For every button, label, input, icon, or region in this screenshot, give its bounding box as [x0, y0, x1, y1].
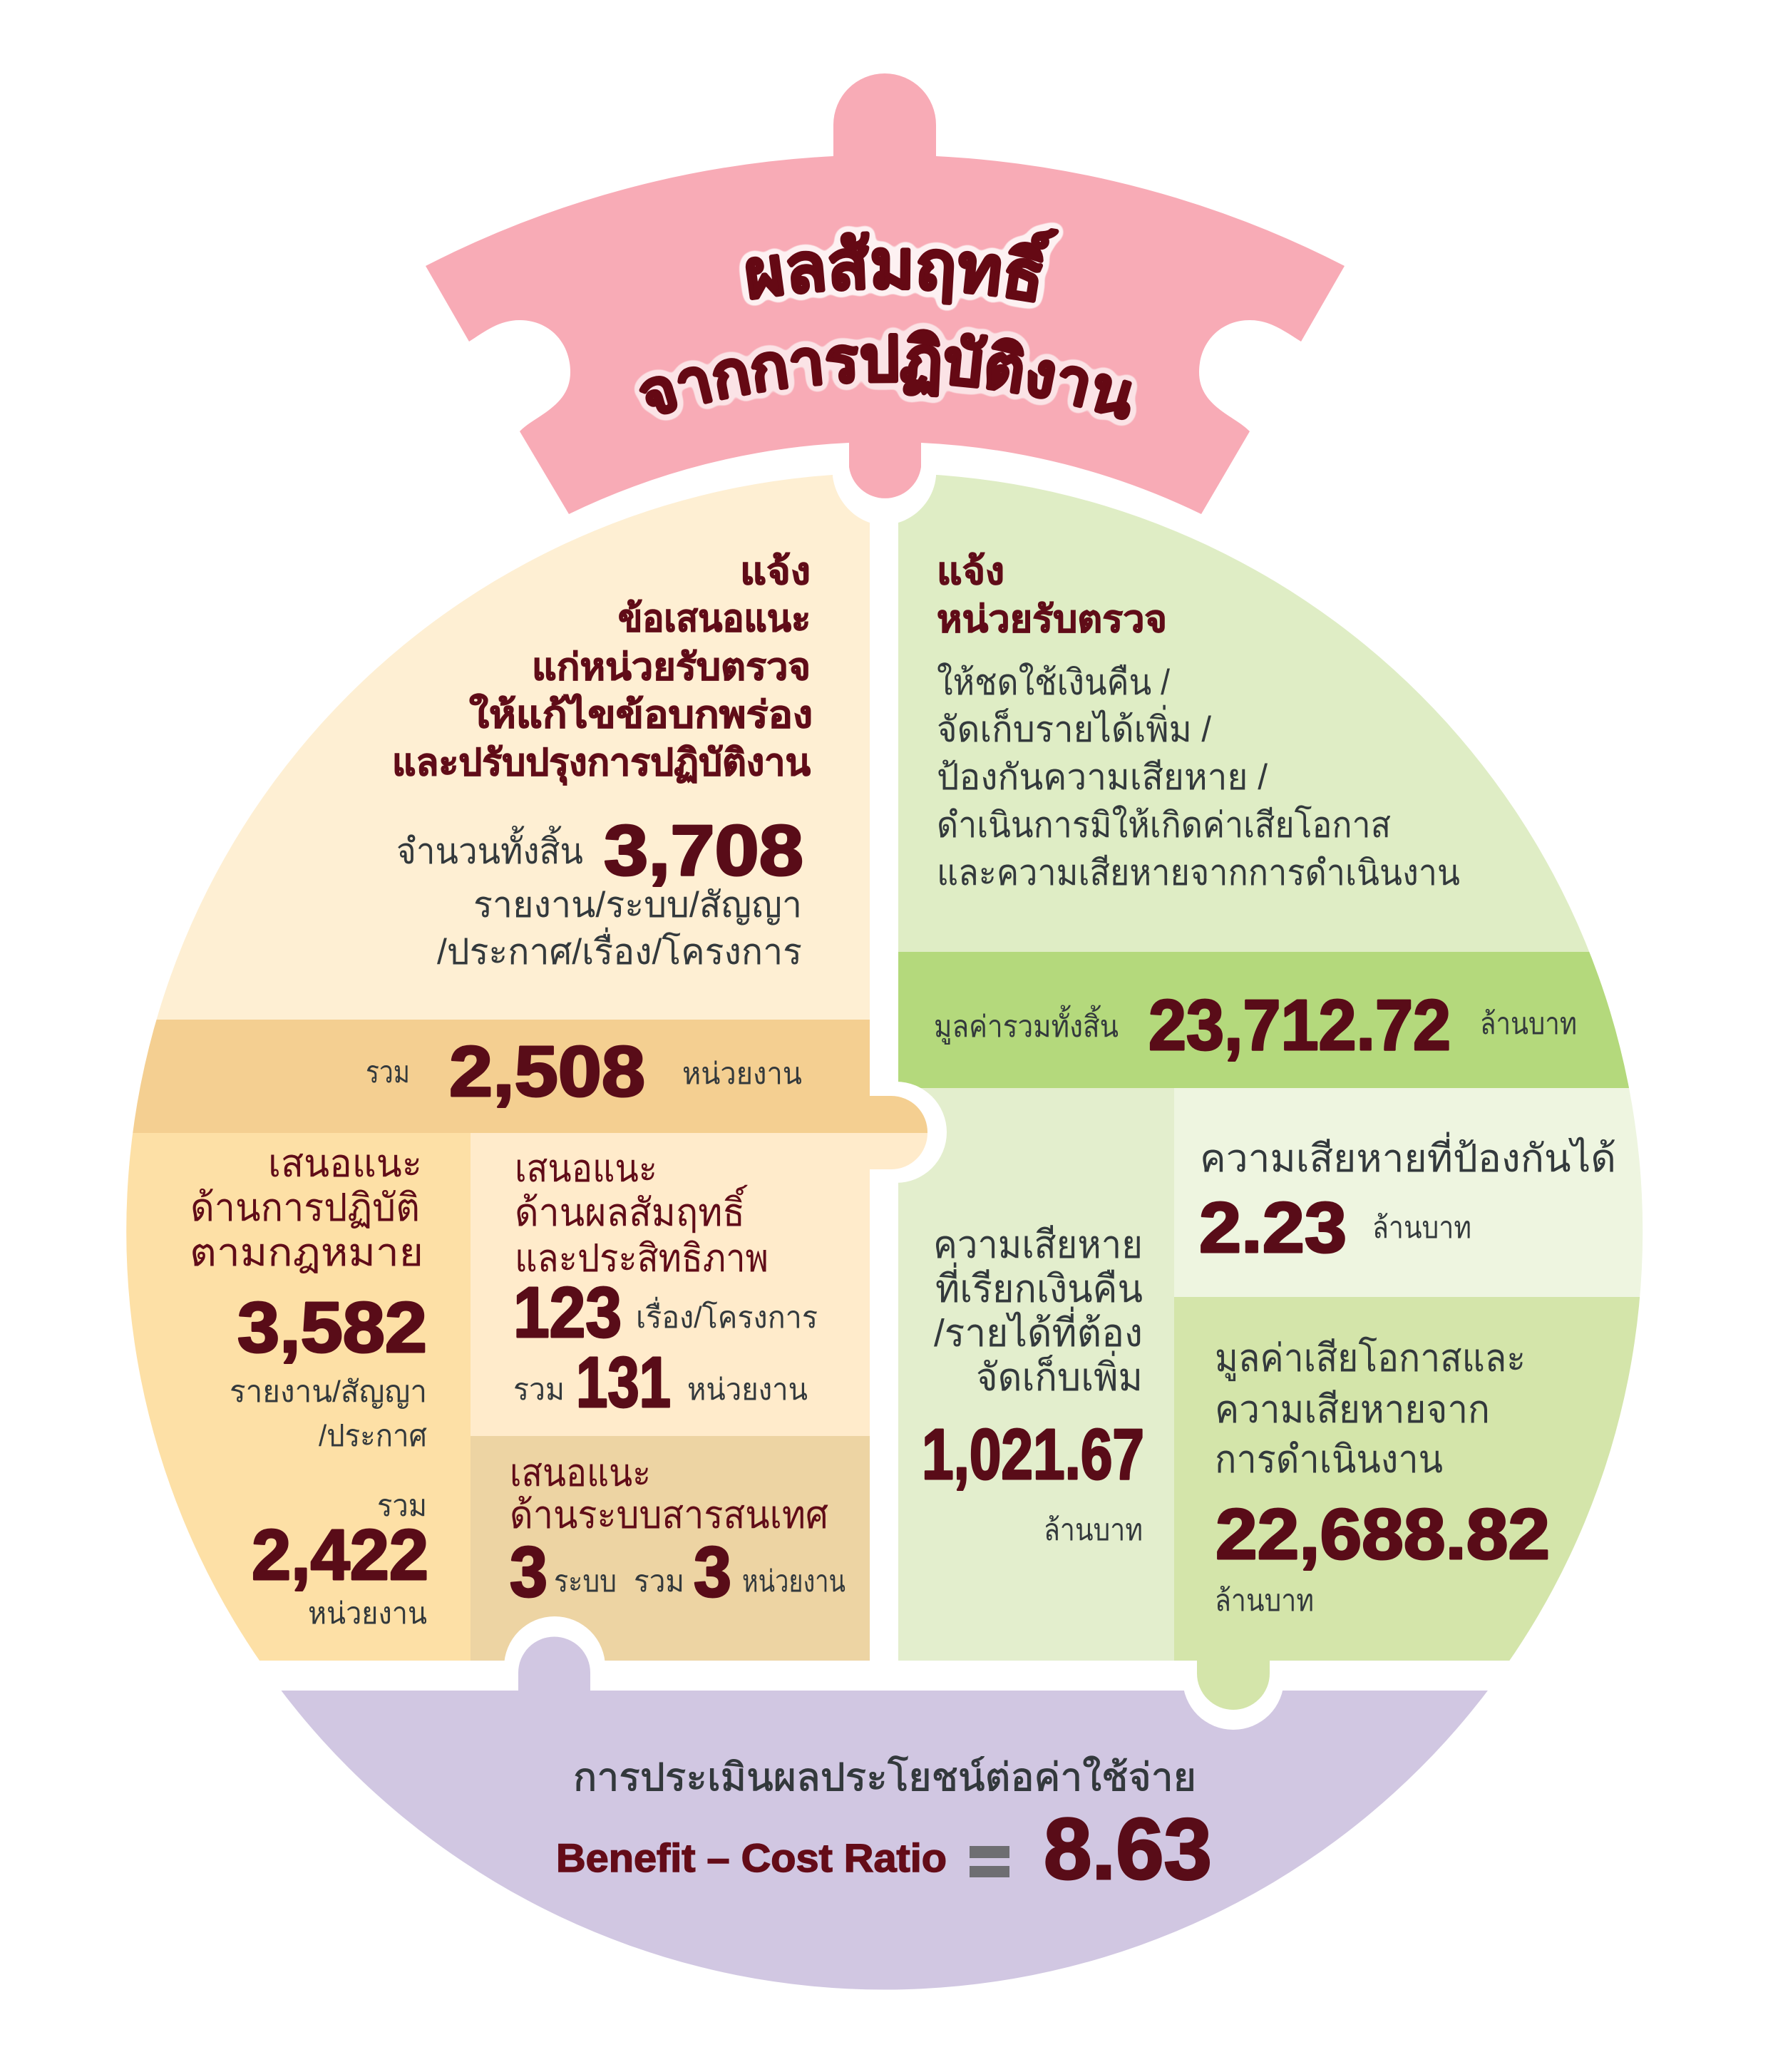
panel text: damage prevented [1199, 1132, 1616, 1268]
panel text: opportunity cost and operating damage: มูลค่าเสียโอกาสและ [1215, 1336, 1526, 1381]
panel text: compliance recommendations: 3,582 [237, 1288, 427, 1368]
stat: total 3,708: /ประกาศ/เรื่อง/โครงการ [437, 928, 802, 972]
text block: benefit-cost assessment: การประเมินผลประโยชน์ต่อค่าใช้จ่าย [573, 1755, 1196, 1799]
panel text: opportunity cost and operating damage [1215, 1336, 1550, 1617]
panel text: performance recommendations: และประสิทธิภาพ [515, 1237, 769, 1280]
stat: 2,508 agencies [366, 1032, 802, 1112]
panel text: performance recommendations: รวม [513, 1373, 565, 1406]
panel text: compliance recommendations: 2,422 [252, 1515, 428, 1595]
stat: 2,508 agencies: หน่วยงาน [682, 1057, 802, 1090]
panel text: refund and additional revenue: /รายได้ที่ต้อง [934, 1306, 1143, 1355]
panel: benefit-cost ratio base [281, 1691, 1488, 1989]
panel text: IT system recommendations: 3 [510, 1532, 548, 1612]
stat: total 3,708: รายงาน/ระบบ/สัญญา [473, 885, 802, 925]
panel text: damage prevented: 2.23 [1199, 1188, 1347, 1268]
panel text: IT system recommendations: หน่วยงาน [742, 1564, 846, 1598]
text block: notify auditee heading: หน่วยรับตรวจ [937, 599, 1167, 640]
text block: notify auditee actions: ป้องกันความเสียหาย / [937, 757, 1268, 797]
panel: left quarter (recommendations) backgrounds [126, 475, 870, 1661]
panel text: performance recommendations: หน่วยงาน [687, 1373, 808, 1406]
panel text: IT system recommendations: ด้านระบบสารสนเทศ [510, 1494, 828, 1537]
icon: equals sign [970, 1846, 1009, 1877]
text block: recommendations heading: และปรับปรุงการปฏิบัติงาน [392, 742, 811, 786]
panel text: compliance recommendations: ตามกฎหมาย [190, 1231, 423, 1274]
panel text: compliance recommendations: ด้านการปฏิบัติ [190, 1186, 420, 1229]
text block: notify auditee heading [937, 551, 1167, 640]
stat: total 3,708: 3,708 [604, 811, 803, 891]
panel text: refund and additional revenue: จัดเก็บเพิ่ม [976, 1350, 1143, 1399]
puzzle knob: lavender connector [518, 1637, 590, 1691]
panel text: performance recommendations: เรื่อง/โครงการ [636, 1297, 818, 1334]
panel: right quarter (notify auditee) backgrounds [898, 475, 1643, 1661]
panel text: opportunity cost and operating damage: ความเสียหายจาก [1215, 1388, 1490, 1431]
panel text: compliance recommendations: รายงาน/สัญญา [230, 1375, 427, 1409]
panel text: IT system recommendations: 3 [694, 1532, 731, 1612]
text block: recommendations heading: ให้แก้ไขข้อบกพร่อง [469, 693, 813, 736]
stat: total 3,708: จำนวนทั้งสิ้น [396, 826, 583, 871]
panel text: opportunity cost and operating damage: 22,688.82 [1216, 1494, 1550, 1574]
text block: notify auditee actions: จัดเก็บรายได้เพิ่ม / [937, 705, 1211, 749]
text block: notify auditee actions [937, 662, 1460, 893]
panel text: IT system recommendations: เสนอแนะ [510, 1452, 651, 1494]
panel text: refund and additional revenue: ที่เรียกเงินคืน [935, 1262, 1143, 1311]
panel text: opportunity cost and operating damage: ล้านบาท [1215, 1584, 1314, 1617]
stat: total value 23,712.72: ล้านบาท [1480, 1007, 1577, 1040]
text block: recommendations heading: แก่หน่วยรับตรวจ [532, 647, 811, 688]
panel text: performance recommendations: 131 [576, 1343, 671, 1422]
panel text: compliance recommendations: รวม [377, 1489, 427, 1522]
puzzle knob: green connector [1197, 1660, 1270, 1710]
label: benefit-cost ratio: Benefit – Cost Ratio [556, 1835, 947, 1880]
panel text: IT system recommendations [510, 1452, 846, 1612]
panel text: compliance recommendations: หน่วยงาน [308, 1596, 427, 1630]
panel text: performance recommendations: 123 [513, 1273, 622, 1353]
panel text: performance recommendations: เสนอแนะ [515, 1147, 657, 1190]
title line 1: ผลสัมฤทธิ์ [739, 222, 1064, 311]
text block: recommendations heading [392, 551, 813, 786]
stat: total value 23,712.72 [934, 985, 1577, 1065]
panel text: damage prevented: ความเสียหายที่ป้องกันได้ [1200, 1132, 1616, 1180]
panel text: opportunity cost and operating damage: การดำเนินงาน [1215, 1438, 1443, 1481]
panel text: compliance recommendations: /ประกาศ [319, 1419, 427, 1452]
stat: total value 23,712.72: 23,712.72 [1148, 985, 1451, 1065]
panel text: performance recommendations [513, 1147, 818, 1422]
stat: total value 23,712.72: มูลค่ารวมทั้งสิ้น [934, 1005, 1119, 1045]
panel text: performance recommendations: ด้านผลสัมฤทธิ์ [515, 1184, 748, 1234]
panel text: refund and additional revenue [922, 1224, 1144, 1547]
panel text: IT system recommendations: ระบบ [554, 1564, 617, 1598]
title line 2: จากการปฏิบัติงาน [634, 322, 1138, 426]
stat: 2,508 agencies: 2,508 [449, 1032, 645, 1112]
panel text: compliance recommendations [190, 1142, 428, 1630]
text block: notify auditee actions: ดำเนินการมิให้เกิดค่าเสียโอกาส [937, 805, 1391, 845]
panel text: refund and additional revenue: ล้านบาท [1044, 1513, 1143, 1547]
panel text: compliance recommendations: เสนอแนะ [268, 1142, 422, 1185]
text block: notify auditee heading: แจ้ง [937, 551, 1004, 593]
panel text: IT system recommendations: รวม [634, 1564, 684, 1598]
text block: notify auditee actions: ให้ชดใช้เงินคืน / [937, 662, 1170, 702]
panel text: refund and additional revenue: 1,021.67 [922, 1415, 1144, 1494]
text block: recommendations heading: ข้อเสนอแนะ [618, 598, 811, 640]
panel: title puzzle piece [426, 73, 1345, 514]
text block: benefit-cost assessment [556, 1755, 1212, 1897]
panel text: refund and additional revenue: ความเสียหาย [933, 1224, 1143, 1266]
puzzle knob: tan band connector [870, 1096, 927, 1169]
stat: ratio value 8.63: 8.63 [1044, 1800, 1212, 1897]
panel text: damage prevented: ล้านบาท [1372, 1211, 1471, 1244]
text block: notify auditee actions: และความเสียหายจากการดำเนินงาน [937, 853, 1460, 893]
stat: 2,508 agencies: รวม [366, 1055, 410, 1089]
text block: recommendations heading: แจ้ง [740, 551, 811, 593]
stat: total 3,708 [396, 811, 803, 972]
